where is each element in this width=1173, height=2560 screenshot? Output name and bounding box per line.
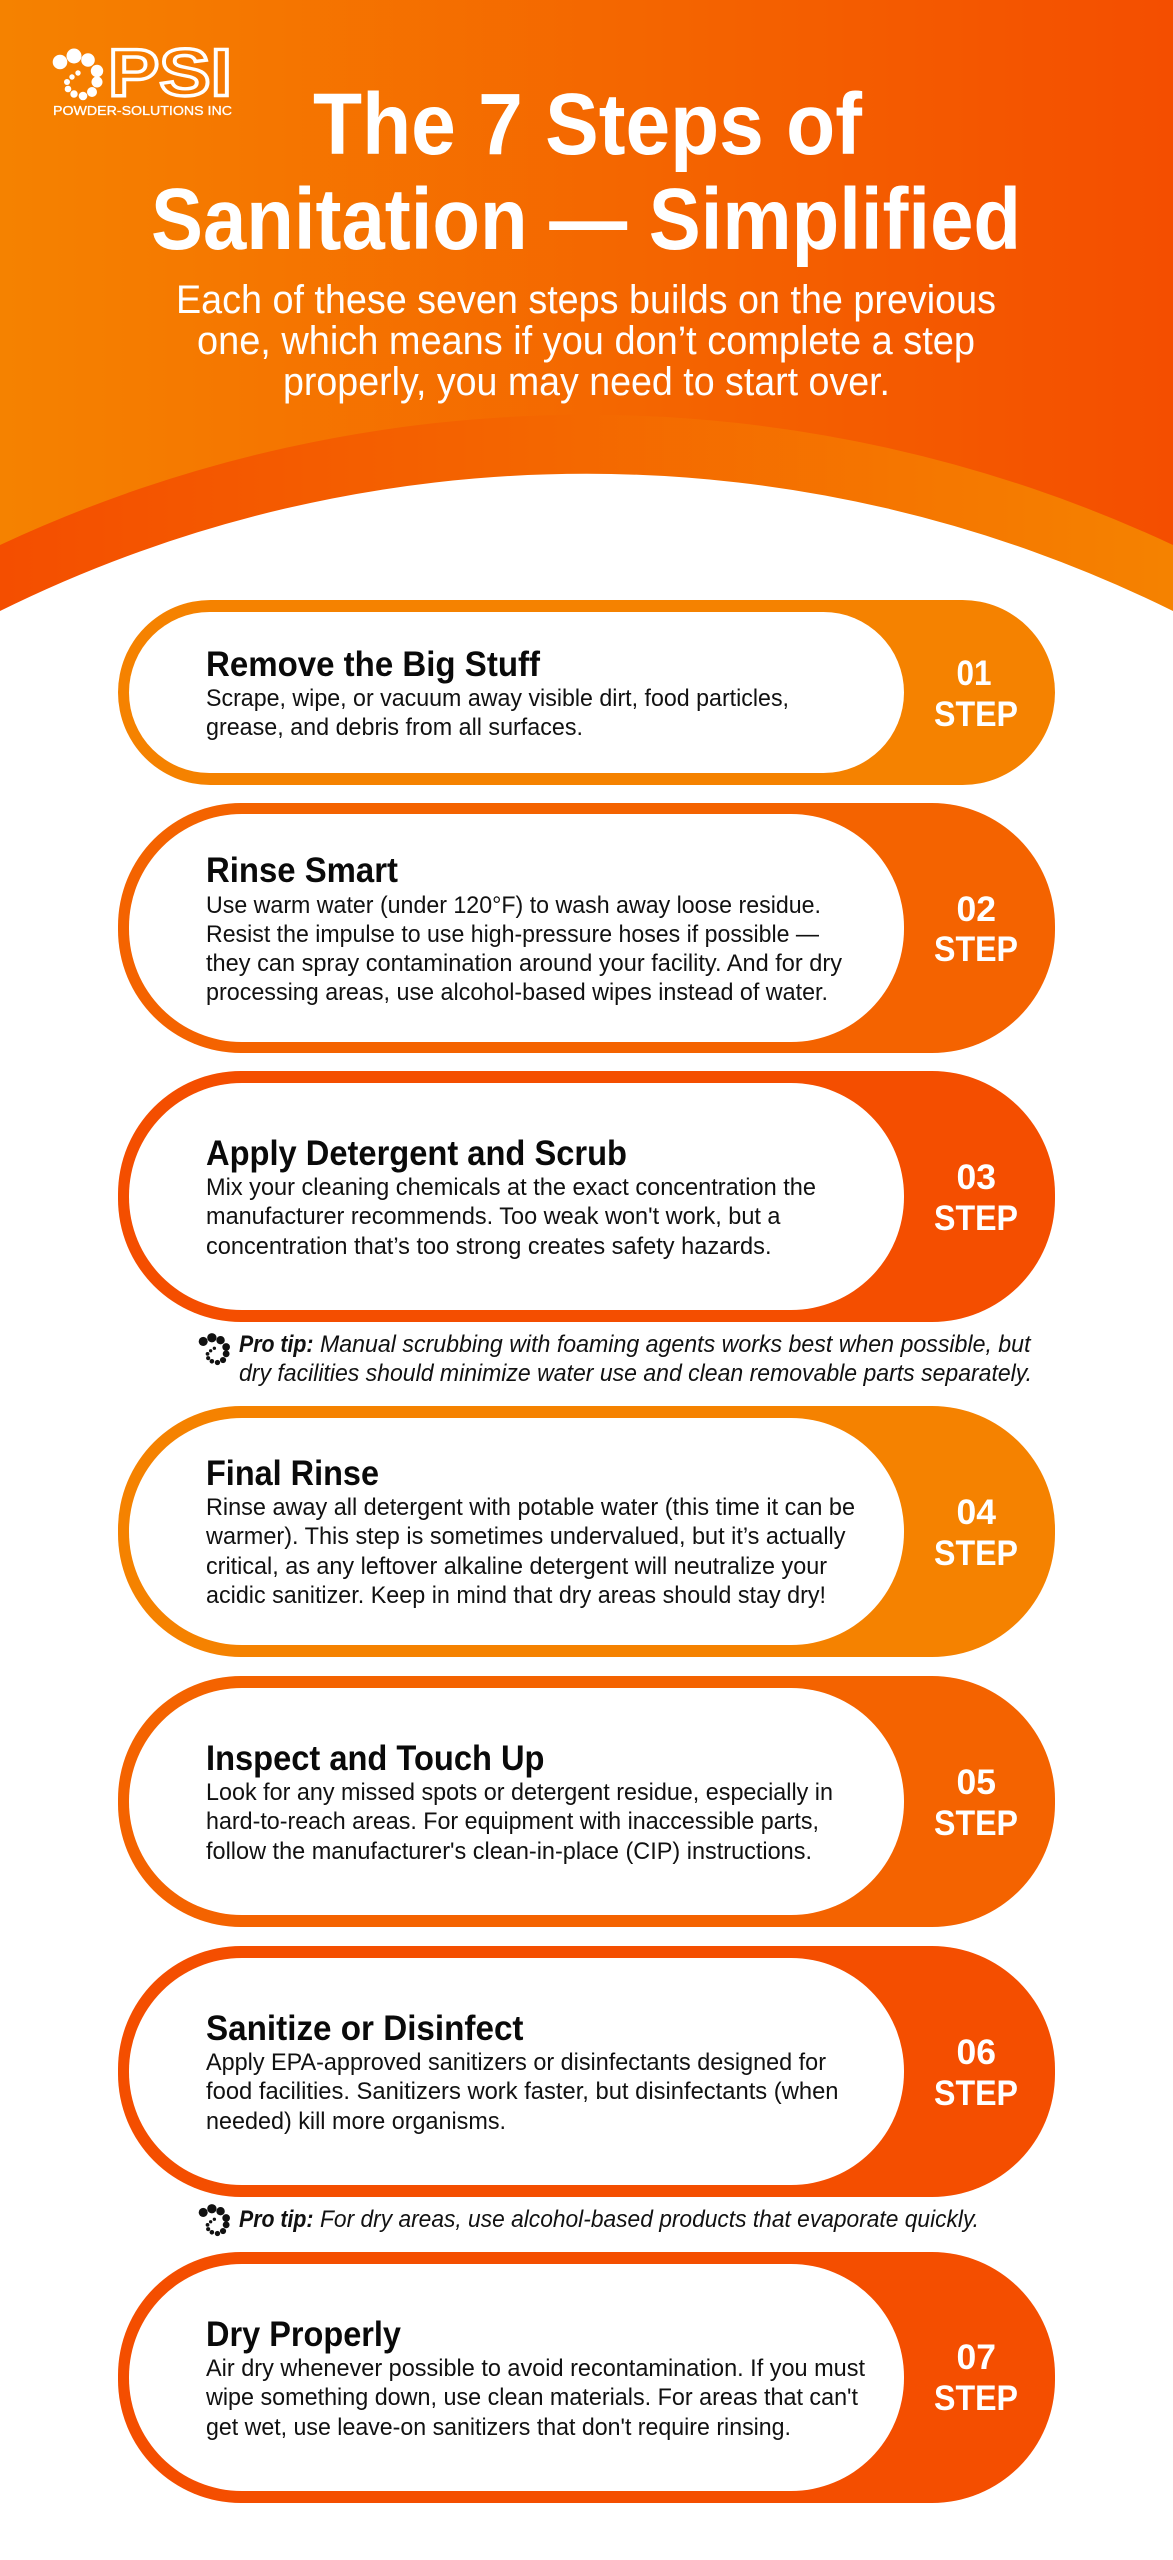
body: step 03: concentration that’s too strong creates safety hazards. bbox=[206, 1233, 772, 1260]
header banner bbox=[0, 0, 1173, 625]
body: step 04 bbox=[205, 1494, 855, 1609]
body: step 02: Resist the impulse to use high-pressure hoses if possible — bbox=[206, 921, 819, 948]
callout: pro tip after step 03: Manual scrubbing with foaming agents works best when possible, but bbox=[320, 1331, 1032, 1358]
body: step 05: hard-to-reach areas. For equipment with inaccessible parts, bbox=[206, 1808, 819, 1835]
panel: step 06 bbox=[118, 1946, 1055, 2197]
curved band bbox=[0, 415, 1173, 625]
panel: step 03 bbox=[118, 1071, 1055, 1322]
body: step 04: Rinse away all detergent with potable water (this time it can be bbox=[206, 1494, 855, 1521]
body: step 02: Use warm water (under 120°F) to wash away loose residue. bbox=[206, 892, 821, 919]
heading: step 05: Inspect and Touch Up bbox=[206, 1738, 544, 1778]
badge: step 04: STEP bbox=[934, 1533, 1018, 1573]
panel: step 07 bbox=[118, 2252, 1055, 2503]
white curve bbox=[0, 474, 1173, 625]
title: Sanitation — Simplified bbox=[151, 171, 1021, 268]
callout: pro tip after step 06 bbox=[199, 2204, 979, 2236]
body: step 06: food facilities. Sanitizers work faster, but disinfectants (when bbox=[206, 2078, 838, 2105]
icon: pro tip dots bbox=[199, 2204, 230, 2236]
panel: step 01 bbox=[118, 600, 1055, 785]
subtitle: properly, you may need to start over. bbox=[283, 360, 890, 404]
body: step 05: Look for any missed spots or detergent residue, especially in bbox=[206, 1779, 833, 1806]
title: The 7 Steps of bbox=[313, 76, 863, 173]
body: step 02 bbox=[206, 892, 843, 1006]
badge: step 03 bbox=[934, 1157, 1018, 1238]
heading: step 01: Remove the Big Stuff bbox=[206, 644, 540, 684]
body: step 02: they can spray contamination around your facility. And for dry bbox=[206, 950, 843, 977]
badge: step 03: STEP bbox=[934, 1198, 1018, 1238]
heading: step 06: Sanitize or Disinfect bbox=[206, 2008, 524, 2048]
logo: PSI Powder Solutions Inc bbox=[53, 36, 232, 118]
badge: step 04: 04 bbox=[956, 1492, 996, 1532]
body: step 02: processing areas, use alcohol-based wipes instead of water. bbox=[206, 979, 828, 1006]
body: step 04: warmer). This step is sometimes undervalued, but it’s actually bbox=[205, 1523, 846, 1550]
body: step 06: Apply EPA-approved sanitizers or disinfectants designed for bbox=[206, 2049, 826, 2076]
subtitle: one, which means if you don’t complete a step bbox=[197, 319, 975, 363]
panel: step 02 bbox=[118, 803, 1055, 1053]
badge: step 01 bbox=[934, 653, 1018, 734]
badge: step 02 bbox=[934, 889, 1018, 969]
badge: step 05: STEP bbox=[934, 1803, 1018, 1843]
subtitle bbox=[176, 278, 996, 404]
badge: step 01: 01 bbox=[956, 653, 992, 693]
heading: step 02: Rinse Smart bbox=[206, 850, 398, 890]
callout: pro tip after step 06: For dry areas, use alcohol-based products that evaporate quickly. bbox=[320, 2206, 979, 2233]
body: step 03: Mix your cleaning chemicals at the exact concentration the bbox=[206, 1174, 816, 1201]
badge: step 07 bbox=[934, 2337, 1018, 2418]
body: step 07 bbox=[205, 2355, 865, 2441]
badge: step 05: 05 bbox=[956, 1762, 996, 1802]
body: step 06: needed) kill more organisms. bbox=[206, 2108, 506, 2135]
panel: step 04 bbox=[118, 1406, 1055, 1657]
callout: pro tip after step 03: Pro tip: bbox=[239, 1331, 314, 1358]
heading: step 07: Dry Properly bbox=[206, 2314, 401, 2354]
badge: step 03: 03 bbox=[956, 1157, 996, 1197]
icon: pro tip dots bbox=[199, 1333, 230, 1365]
logo wordmark: PSI bbox=[108, 36, 232, 110]
body: step 06 bbox=[206, 2049, 838, 2135]
body: step 01: grease, and debris from all surfaces. bbox=[206, 714, 583, 741]
callout: pro tip after step 03: dry facilities should minimize water use and clean removable parts separately. bbox=[239, 1360, 1032, 1387]
title bbox=[151, 76, 1021, 268]
body: step 04: acidic sanitizer. Keep in mind that dry areas should stay dry! bbox=[206, 1582, 826, 1609]
subtitle: Each of these seven steps builds on the previous bbox=[176, 278, 996, 322]
body: step 04: critical, as any leftover alkaline detergent will neutralize your bbox=[206, 1553, 827, 1580]
body: step 07: get wet, use leave-on sanitizers that don't require rinsing. bbox=[206, 2414, 791, 2441]
badge: step 04 bbox=[934, 1492, 1018, 1573]
badge: step 02: STEP bbox=[934, 929, 1018, 969]
body: step 07: wipe something down, use clean materials. For areas that can't bbox=[205, 2384, 858, 2411]
callout: pro tip after step 03 bbox=[199, 1331, 1032, 1387]
logo tagline: POWDER-SOLUTIONS INC bbox=[53, 103, 232, 118]
badge: step 05 bbox=[934, 1762, 1018, 1843]
body: step 05: follow the manufacturer's clean-in-place (CIP) instructions. bbox=[206, 1838, 812, 1865]
logo mark bbox=[53, 48, 103, 100]
badge: step 07: 07 bbox=[956, 2337, 996, 2377]
body: step 07: Air dry whenever possible to avoid recontamination. If you must bbox=[206, 2355, 865, 2382]
badge: step 07: STEP bbox=[934, 2378, 1018, 2418]
heading: step 03: Apply Detergent and Scrub bbox=[206, 1133, 627, 1173]
badge: step 06: 06 bbox=[956, 2032, 996, 2072]
body: step 03 bbox=[206, 1174, 816, 1260]
badge: step 01: STEP bbox=[934, 694, 1018, 734]
body: step 01: Scrape, wipe, or vacuum away visible dirt, food particles, bbox=[206, 685, 789, 712]
body: step 01 bbox=[206, 685, 789, 741]
panel: step 05 bbox=[118, 1676, 1055, 1927]
badge: step 06 bbox=[934, 2032, 1018, 2113]
heading: step 04: Final Rinse bbox=[206, 1453, 379, 1493]
badge: step 06: STEP bbox=[934, 2073, 1018, 2113]
body: step 03: manufacturer recommends. Too weak won't work, but a bbox=[206, 1203, 781, 1230]
callout: pro tip after step 06: Pro tip: bbox=[239, 2206, 314, 2233]
body: step 05 bbox=[206, 1779, 833, 1865]
badge: step 02: 02 bbox=[956, 889, 996, 929]
